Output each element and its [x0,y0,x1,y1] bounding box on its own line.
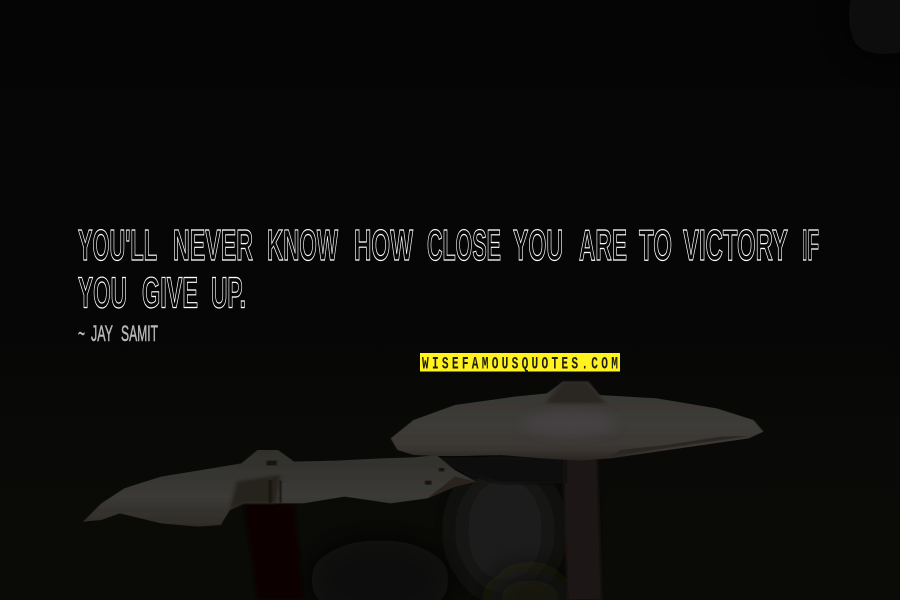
attribution: SAMIT [121,321,158,346]
quote line 1: VICTORY [683,221,788,270]
attribution [78,321,158,346]
quote line 2: YOU [78,268,127,318]
quote line 1: HOW [354,221,413,270]
quote line 2: GIVE [142,268,198,318]
right mushroom stem [563,458,602,600]
quote line 1: ARE [579,221,627,270]
badge background [420,353,620,372]
left mushroom cap [83,450,476,527]
left cap rim [427,477,476,498]
left cap gills [230,475,280,510]
right cap rim [611,436,749,456]
left mushroom stem [244,503,303,600]
quote line 2: UP. [211,268,246,318]
quote line 1: TO [639,221,672,270]
watermark badge [420,353,620,375]
quote line 1: CLOSE [427,221,501,270]
attribution: JAY [91,321,113,346]
quote line 1: YOU [513,221,563,270]
quote line 1: YOU'LL [78,221,157,270]
badge text: WISEFAMOUSQUOTES.COM [422,355,618,375]
right cap knob [547,382,606,403]
right cap pale centre [524,410,616,437]
attribution: ~ [78,321,85,346]
quote line 1 [78,221,819,270]
quote line 2 [78,268,246,318]
shadow under right cap [437,457,565,483]
quote line 1: NEVER [173,221,253,270]
right mushroom cap [391,382,763,461]
left cap spots [267,461,444,503]
quote text [78,221,819,318]
infographic canvas: IF [802,221,819,270]
mushrooms [83,382,763,600]
quote line 1: KNOW [267,221,338,270]
